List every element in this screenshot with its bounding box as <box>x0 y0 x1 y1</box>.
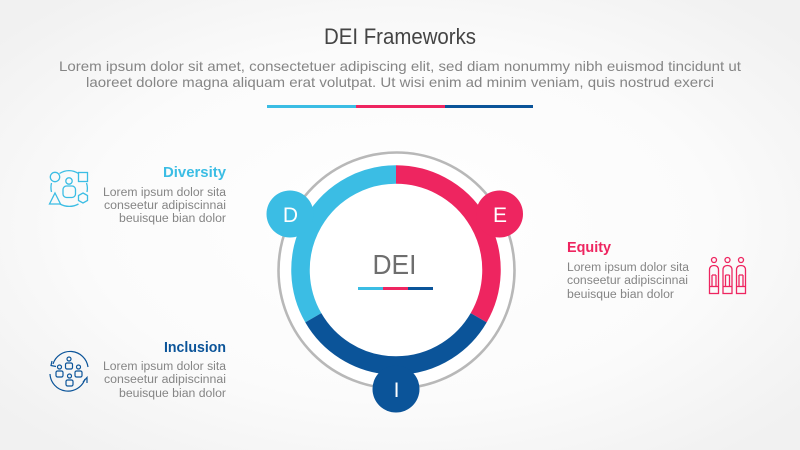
inclusion heading: Inclusion <box>164 339 226 356</box>
intro text <box>59 58 741 90</box>
equity heading: Equity <box>567 239 612 256</box>
icon: inclusive group <box>50 351 88 391</box>
outer gray ring <box>278 152 514 388</box>
badge: D <box>266 190 314 238</box>
intro text: Lorem ipsum dolor sit amet, consectetuer adipiscing elit, sed diam nonummy nibh euismod tincidunt ut <box>59 58 741 74</box>
badge: I: I <box>394 379 399 402</box>
panel: inclusion <box>50 339 227 400</box>
badge: I <box>372 366 420 412</box>
badge: D: D <box>283 204 298 227</box>
inclusion text: beuisque bian dolor <box>119 388 226 400</box>
central circle diagram <box>266 152 523 412</box>
title: DEI Frameworks <box>324 24 476 49</box>
inclusion text: conseetur adipiscinnai <box>104 374 226 386</box>
intro text: laoreet dolore magna aliquam erat volutpat. Ut wisi enim ad minim veniam, quis nostrud exerci <box>86 74 714 90</box>
segment: inclusion <box>313 318 479 365</box>
title divider <box>267 105 533 108</box>
segment: diversity <box>301 174 396 318</box>
icon: diverse people <box>50 171 88 206</box>
equity text: Lorem ipsum dolor sita <box>567 262 690 274</box>
equity text: beuisque bian dolor <box>567 289 674 301</box>
badge: E: E <box>493 204 507 227</box>
segment: equity <box>396 174 491 318</box>
panel: equity <box>567 239 746 301</box>
inclusion text: Lorem ipsum dolor sita <box>103 361 227 373</box>
diversity heading: Diversity <box>163 164 227 181</box>
diversity text: conseetur adipiscinnai <box>104 200 226 212</box>
diversity text: beuisque bian dolor <box>119 213 226 225</box>
icon: three equal figures <box>710 258 746 294</box>
inclusion text <box>103 361 227 400</box>
panel: diversity <box>50 164 227 225</box>
badge: E <box>476 190 523 238</box>
diversity text: Lorem ipsum dolor sita <box>103 187 227 199</box>
equity text: conseetur adipiscinnai <box>567 275 688 287</box>
center underline <box>358 287 433 290</box>
equity text <box>567 262 690 301</box>
diversity text <box>103 187 227 225</box>
center label: DEI <box>372 249 416 280</box>
